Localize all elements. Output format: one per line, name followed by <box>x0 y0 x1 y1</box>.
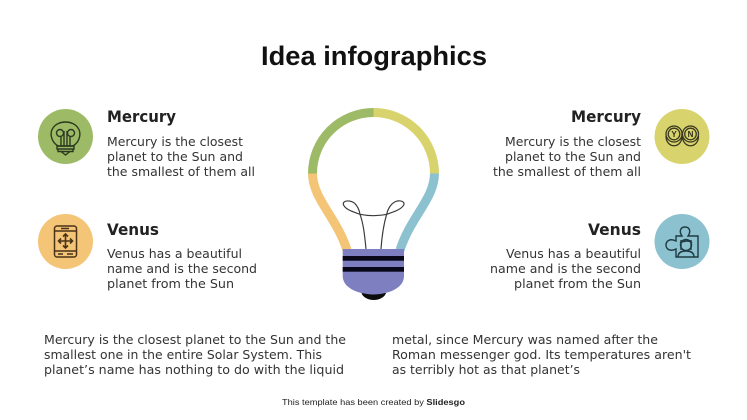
text block: Venus has a beautiful <box>107 247 242 261</box>
bottom text left: planet’s name has nothing to do with the liquid <box>44 363 344 377</box>
footer credit: This template has been created by Slidesgo <box>282 397 465 407</box>
text block: Mercury is the closest <box>107 135 243 149</box>
bottom text right: Roman messenger god. Its temperatures aren't <box>392 348 691 362</box>
bottom text left: Mercury is the closest planet to the Sun and the <box>44 333 346 347</box>
text block: Mercury is the closest <box>505 135 641 149</box>
heading: Venus <box>588 220 641 239</box>
filament <box>343 201 404 249</box>
icon: yes and no buttons: Y <box>671 130 677 139</box>
heading: Venus <box>107 220 159 239</box>
text block: the smallest of them all <box>493 165 641 179</box>
heading: Mercury <box>571 107 642 126</box>
icon: yes and no buttons: N <box>688 130 694 139</box>
text block: the smallest of them all <box>107 165 255 179</box>
text block: planet from the Sun <box>107 277 234 291</box>
panel: bottom right Venus <box>490 214 710 291</box>
text block: name and is the second <box>107 262 257 276</box>
panel: top right Mercury <box>493 107 710 179</box>
bulb segment: blue <box>400 173 434 250</box>
icon: light bulb <box>38 109 93 164</box>
bottom text right: as terribly hot as that planet’s <box>392 363 580 377</box>
title: Idea infographics <box>261 41 487 71</box>
bulb cap tip <box>362 293 386 300</box>
bulb segment: orange <box>312 173 347 250</box>
bottom text right: metal, since Mercury was named after the <box>392 333 658 347</box>
text block <box>107 135 255 179</box>
heading: Mercury <box>107 107 177 126</box>
icon: phone with arrows <box>38 214 93 269</box>
bulb segment: yellow <box>374 112 434 174</box>
text block: name and is the second <box>490 262 641 276</box>
text block: planet from the Sun <box>514 277 641 291</box>
bulb segment: green <box>312 112 374 174</box>
panel: bottom left Venus <box>38 214 257 291</box>
icon: puzzle piece with portrait <box>654 214 710 269</box>
text block: planet to the Sun and <box>505 150 641 164</box>
central light bulb <box>312 112 434 300</box>
bottom text left: smallest one in the entire Solar System. This <box>44 348 322 362</box>
icon: yes and no buttons <box>654 109 710 164</box>
bottom text left <box>44 333 346 377</box>
base stripes <box>343 256 404 272</box>
text block <box>493 135 641 179</box>
text block <box>107 247 257 291</box>
bulb base <box>343 249 404 294</box>
text block: planet to the Sun and <box>107 150 243 164</box>
panel: top left Mercury <box>38 107 255 179</box>
text block: Venus has a beautiful <box>506 247 641 261</box>
text block <box>490 247 641 291</box>
bottom text right <box>392 333 691 377</box>
